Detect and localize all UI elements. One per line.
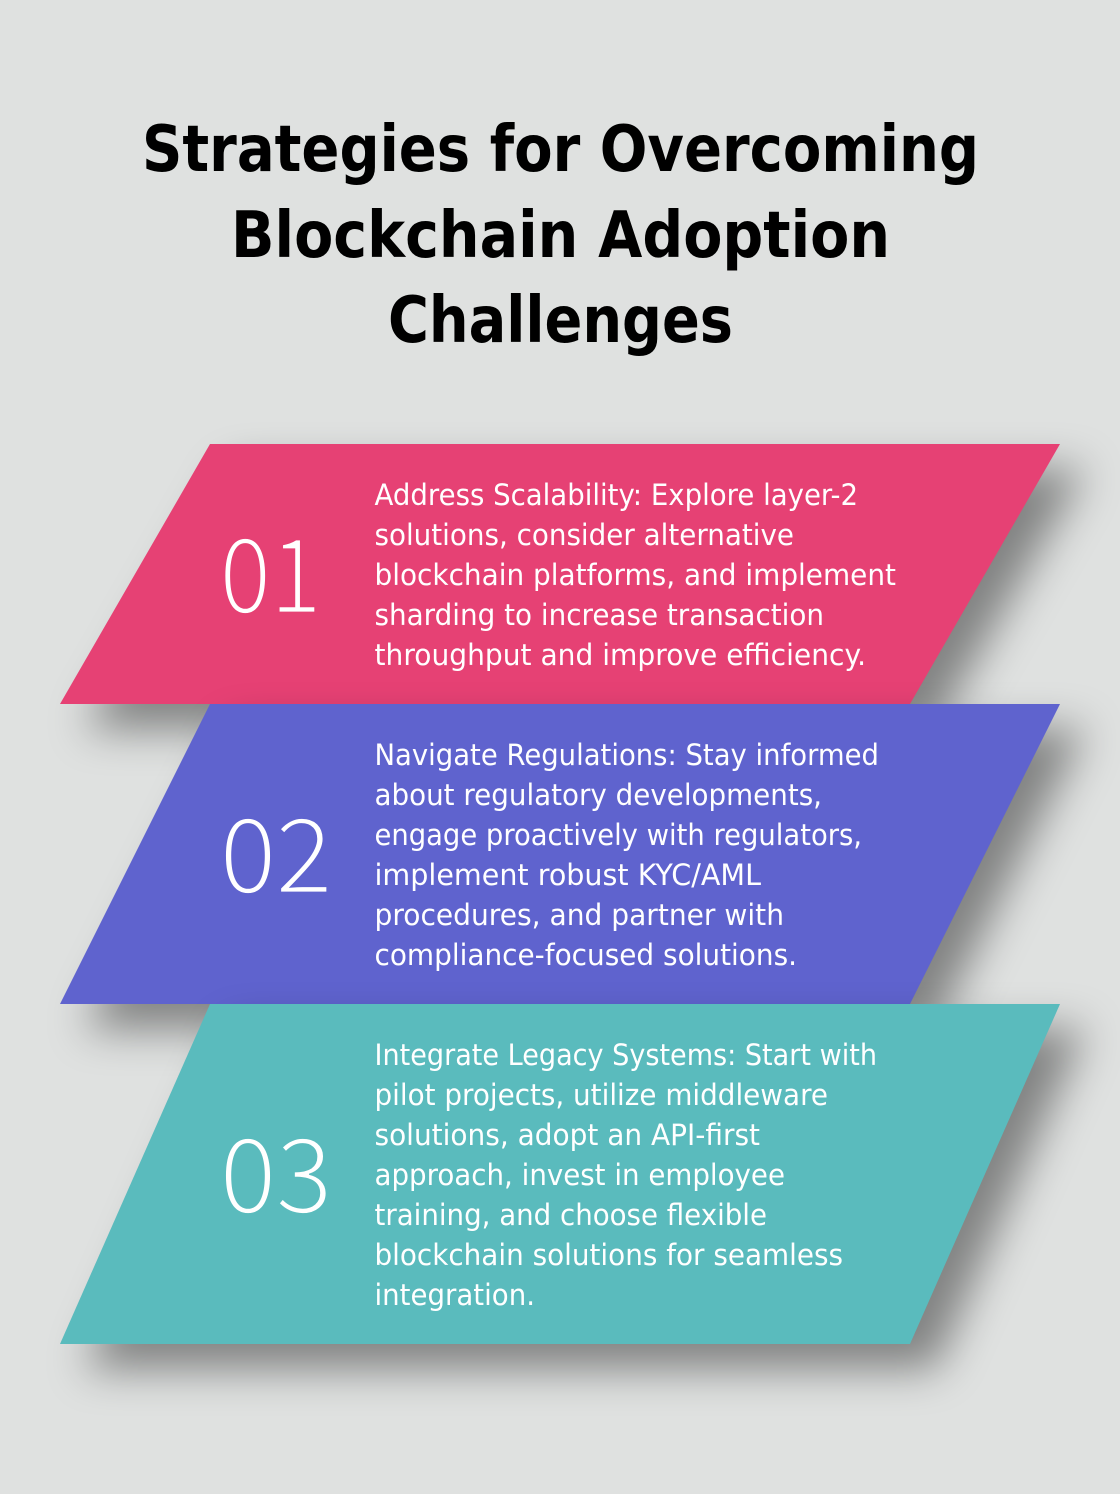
number 02: 02 (220, 775, 332, 922)
text: integrate legacy systems: approach, invest in employee (374, 1158, 785, 1192)
panel: 03 integrate legacy systems (60, 1004, 1085, 1369)
title: Blockchain Adoption (231, 199, 890, 273)
text: navigate regulations: procedures, and partner with (374, 898, 784, 932)
text: integrate legacy systems: blockchain solutions for seamless (374, 1238, 843, 1272)
text: navigate regulations (374, 738, 879, 972)
text: address scalability: solutions, consider alternative (374, 518, 794, 552)
text: address scalability: Address Scalability: Explore layer-2 (374, 478, 858, 512)
text: integrate legacy systems: training, and choose flexible (374, 1198, 767, 1232)
text: navigate regulations: about regulatory developments, (374, 778, 822, 812)
panel: 01 address scalability (60, 444, 1085, 729)
text: address scalability (374, 478, 896, 672)
text: address scalability: blockchain platforms, and implement (374, 558, 896, 592)
text: integrate legacy systems (374, 1038, 877, 1312)
text: navigate regulations: Navigate Regulations: Stay informed (374, 738, 879, 772)
text: integrate legacy systems: solutions, adopt an API-first (374, 1118, 760, 1152)
text: integrate legacy systems: Integrate Legacy Systems: Start with (374, 1038, 877, 1072)
number 01: 01 (220, 495, 321, 642)
number 03: 03 (220, 1095, 332, 1242)
text: navigate regulations: implement robust KYC/AML (374, 858, 762, 892)
text: address scalability: sharding to increase transaction (374, 598, 824, 632)
text: address scalability: throughput and improve efficiency. (374, 638, 866, 672)
text: integrate legacy systems: integration. (374, 1278, 535, 1312)
title: Strategies for Overcoming (142, 113, 979, 187)
title (142, 113, 979, 358)
text: navigate regulations: engage proactively with regulators, (374, 818, 862, 852)
title: Challenges (388, 284, 733, 358)
text: integrate legacy systems: pilot projects, utilize middleware (374, 1078, 828, 1112)
panel: 02 navigate regulations (60, 704, 1085, 1029)
text: navigate regulations: compliance-focused solutions. (374, 938, 797, 972)
